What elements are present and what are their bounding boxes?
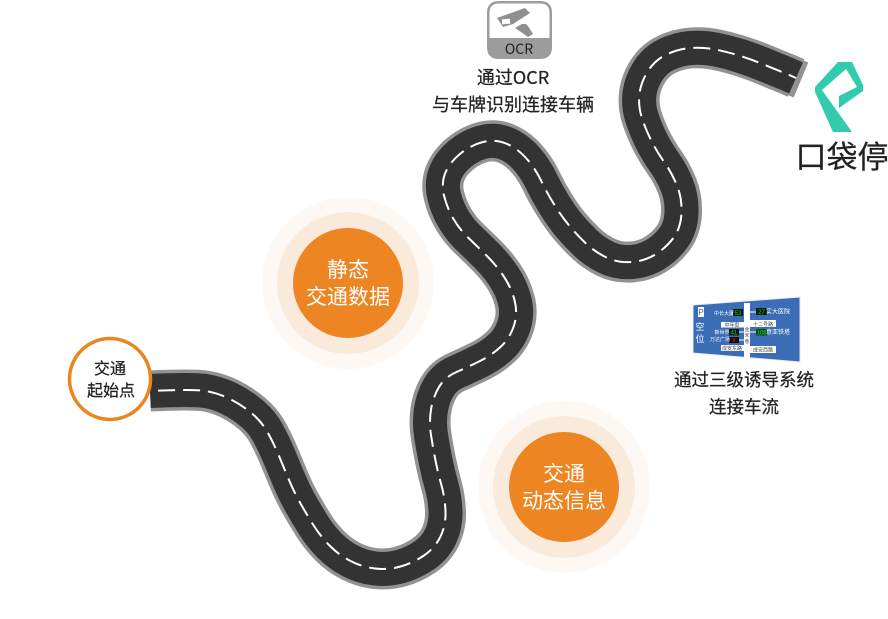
road	[150, 48, 801, 569]
icon: OCR camera	[487, 1, 552, 59]
circle: dynamic traffic information: 动态信息	[522, 490, 606, 513]
text: OCR caption: 通过OCR	[477, 64, 549, 90]
text: OCR caption: 与车牌识别连接车辆	[432, 91, 594, 117]
guidance sign: 108	[756, 330, 767, 336]
guidance sign: 41	[731, 330, 738, 336]
guidance sign: 27	[758, 310, 765, 316]
guidance sign: 位	[695, 333, 705, 344]
guidance sign: 53	[735, 311, 742, 317]
circle: dynamic traffic information	[478, 401, 650, 573]
guidance sign: 中年街	[724, 322, 740, 328]
guidance sign: 金	[745, 326, 750, 332]
guidance sign: 成安西路	[753, 346, 773, 354]
guidance sign	[693, 297, 800, 362]
guidance sign: 空	[695, 321, 705, 332]
circle: dynamic traffic information: 交通	[543, 463, 585, 486]
guidance sign: 新世界	[714, 329, 730, 336]
text: guidance caption	[674, 370, 814, 417]
circle: static traffic data: 交通数据	[306, 286, 390, 309]
circle: start of traffic: 起始点	[87, 382, 135, 400]
guidance sign: 万达广场	[710, 336, 730, 343]
circle: start of traffic	[70, 338, 150, 420]
circle: start of traffic: 交通	[94, 360, 126, 378]
text: guidance caption: 通过三级诱导系统	[674, 370, 814, 390]
guidance sign: 实大医院	[766, 308, 790, 316]
guidance sign: P	[698, 308, 704, 317]
circle: static traffic data: 静态	[327, 259, 369, 282]
logo: 口袋停	[796, 62, 888, 175]
icon: OCR camera: OCR	[505, 39, 533, 59]
guidance sign: 十二号路	[753, 321, 773, 328]
guidance sign: 意亚铁塔	[766, 328, 790, 336]
guidance sign: 中长大厦	[714, 310, 734, 317]
guidance sign: 禾	[745, 332, 750, 339]
guidance sign: 巷	[745, 339, 750, 344]
logo: 口袋停: 口袋停	[796, 140, 888, 175]
guidance sign: 成安东路	[722, 345, 742, 352]
text: guidance caption: 连接车流	[709, 397, 779, 417]
guidance sign: 8	[733, 338, 736, 344]
text: OCR caption	[432, 64, 594, 117]
circle: static traffic data	[262, 197, 434, 369]
